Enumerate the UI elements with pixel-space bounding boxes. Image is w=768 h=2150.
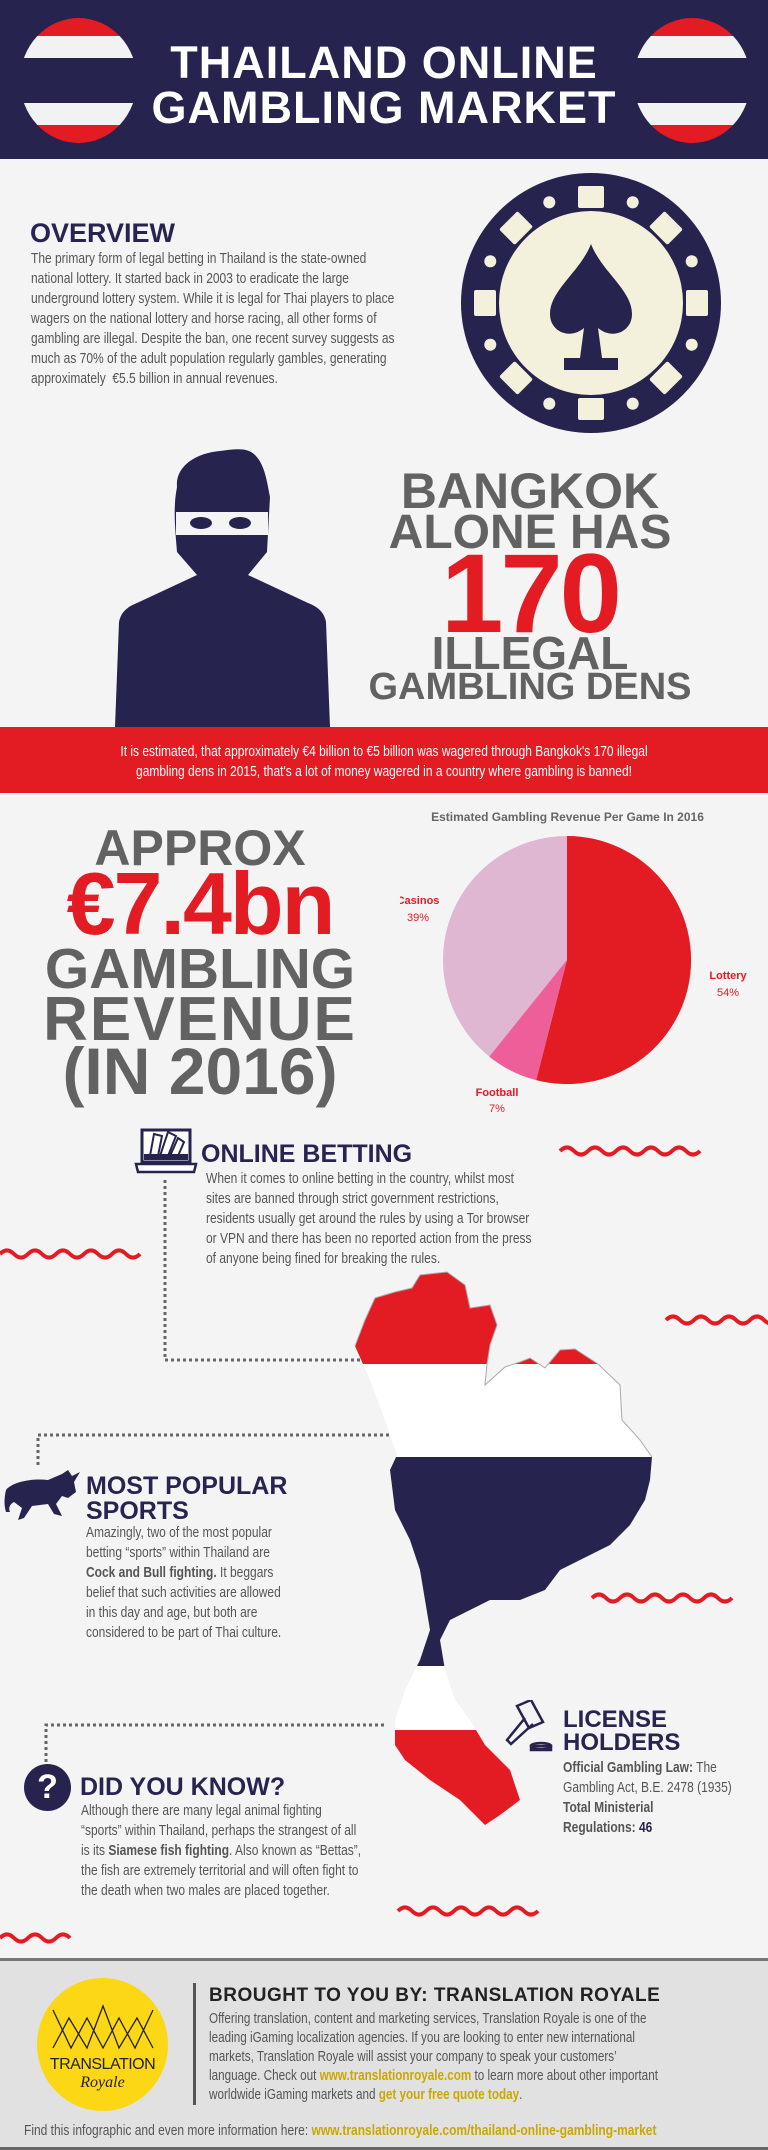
most popular sports text: betting “sports” within Thailand are xyxy=(86,1544,270,1561)
icon: laptop with money xyxy=(134,1128,198,1174)
most popular sports text: in this day and age, but both are xyxy=(86,1604,257,1621)
logo: translation royale: TRANSLATION xyxy=(50,2056,155,2073)
icon: right flag circle xyxy=(638,18,746,143)
license holders heading: LICENSE xyxy=(563,1706,667,1733)
footer text: language. Check out www.translationroyale.com to learn more about other important xyxy=(209,2067,658,2084)
overview text: underground lottery system. While it is legal for Thai players to place xyxy=(31,290,394,307)
bangkok stat: ILLEGAL xyxy=(432,627,628,679)
did you know text: the fish are extremely territorial and will often fight to xyxy=(81,1862,358,1879)
online betting text: When it comes to online betting in the country, whilst most xyxy=(206,1170,514,1187)
bangkok stat: BANGKOK xyxy=(401,463,659,519)
most popular sports text: Amazingly, two of the most popular xyxy=(86,1524,272,1541)
footer text: markets, Translation Royale will assist your company to speak your customers’ xyxy=(209,2048,617,2065)
overview text: approximately €5.5 billion in annual revenues. xyxy=(31,370,278,387)
title: GAMBLING MARKET xyxy=(152,82,616,133)
icon: poker chip with spade xyxy=(461,173,721,433)
online betting text xyxy=(206,1170,532,1267)
license holders text xyxy=(563,1759,732,1836)
did you know text: “sports” within Thailand, perhaps the strangest of all xyxy=(81,1822,356,1839)
pie chart: Lottery xyxy=(709,970,748,982)
footer text xyxy=(209,2010,658,2103)
icon: masked man xyxy=(115,449,330,727)
overview text: wagers on the national lottery and horse racing, all other forms of xyxy=(31,310,377,327)
red band callout: gambling dens in 2015, that's a lot of money wagered in a country where gambling is banned! xyxy=(136,763,632,780)
most popular sports text: considered to be part of Thai culture. xyxy=(86,1624,281,1641)
most popular sports text xyxy=(86,1524,281,1641)
icon: gavel xyxy=(505,1700,552,1752)
most popular sports heading xyxy=(86,1472,287,1525)
icon: question mark xyxy=(24,1764,71,1811)
title: THAILAND ONLINE xyxy=(170,37,598,88)
revenue stat: (IN 2016) xyxy=(62,1034,338,1108)
license holders text: Total Ministerial xyxy=(563,1799,653,1816)
footer text: worldwide iGaming markets and get your free quote today. xyxy=(209,2086,522,2103)
license holders heading: HOLDERS xyxy=(563,1729,680,1756)
logo: translation royale xyxy=(37,1978,168,2111)
did you know heading: DID YOU KNOW? xyxy=(80,1773,285,1801)
footer panel xyxy=(0,1958,768,2150)
logo: translation royale: Royale xyxy=(80,2074,125,2091)
overview text: gambling are illegal. Despite the ban, one recent survey suggests as xyxy=(31,330,395,347)
did you know text: Although there are many legal animal fighting xyxy=(81,1802,322,1819)
most popular sports text: Cock and Bull fighting. It beggars xyxy=(86,1564,273,1581)
icon: left flag circle xyxy=(24,18,133,143)
stat number 170: 170 xyxy=(441,531,619,656)
pie chart: 7% xyxy=(489,1103,505,1115)
did you know text: is its Siamese fish fighting. Also known as “Bettas”, xyxy=(81,1842,361,1859)
map: thailand in flag colours xyxy=(354,1272,652,1825)
icon: bull xyxy=(4,1470,80,1520)
red band callout xyxy=(0,727,768,793)
footer text: leading iGaming localization agencies. If you are looking to enter new international xyxy=(209,2029,635,2046)
bangkok stat: GAMBLING DENS xyxy=(368,666,692,708)
license holders text: Official Gambling Law: The xyxy=(563,1759,717,1776)
revenue number: €7.4bn xyxy=(67,854,333,953)
revenue stat: GAMBLING xyxy=(45,937,355,1001)
online betting text: sites are banned through strict government restrictions, xyxy=(206,1190,499,1207)
revenue stat: APPROX xyxy=(94,820,306,876)
pie chart: 54% xyxy=(717,987,739,999)
pie chart: 39% xyxy=(407,912,429,924)
online betting text: residents usually get around the rules by using a Tor browser xyxy=(206,1210,529,1227)
license holders text: Gambling Act, B.E. 2478 (1935) xyxy=(563,1779,732,1796)
bangkok stat xyxy=(368,463,692,708)
bangkok stat: ALONE HAS xyxy=(389,506,671,559)
pie chart: Football xyxy=(476,1087,518,1099)
footer link line: Find this infographic and even more information here: www.translationroyale.com/thailand-online-gambling-market xyxy=(24,2122,656,2139)
most popular sports heading: SPORTS xyxy=(86,1497,189,1525)
red band callout: It is estimated, that approximately €4 billion to €5 billion was wagered through Bangkok's 170 illegal xyxy=(120,743,648,760)
overview text: much as 70% of the adult population regularly gambles, generating xyxy=(31,350,387,367)
overview heading: OVERVIEW xyxy=(30,218,175,248)
online betting heading: ONLINE BETTING xyxy=(201,1140,412,1168)
title xyxy=(152,37,616,133)
online betting text: of anyone being fined for breaking the rules. xyxy=(206,1250,440,1267)
did you know text: the death when two males are placed together. xyxy=(81,1882,330,1899)
overview text: The primary form of legal betting in Thailand is the state-owned xyxy=(31,250,366,267)
license holders heading xyxy=(563,1706,680,1756)
online betting text: or VPN and there has been no reported action from the press xyxy=(206,1230,532,1247)
license holders text: Regulations: 46 xyxy=(563,1819,652,1836)
most popular sports text: belief that such activities are allowed xyxy=(86,1584,281,1601)
chart title: Estimated Gambling Revenue Per Game In 2016 xyxy=(431,810,704,824)
revenue stat xyxy=(43,820,357,1108)
revenue stat: REVENUE xyxy=(43,985,357,1054)
overview text: national lottery. It started back in 2003 to eradicate the large xyxy=(31,270,349,287)
icon: question mark: ? xyxy=(37,1768,58,1806)
did you know text xyxy=(81,1802,361,1899)
most popular sports heading: MOST POPULAR xyxy=(86,1472,287,1500)
footer text: Offering translation, content and marketing services, Translation Royale is one of the xyxy=(209,2010,646,2027)
header banner xyxy=(0,0,768,159)
footer heading: BROUGHT TO YOU BY: TRANSLATION ROYALE xyxy=(209,1985,660,2006)
pie chart xyxy=(400,836,748,1115)
overview text xyxy=(31,250,395,387)
